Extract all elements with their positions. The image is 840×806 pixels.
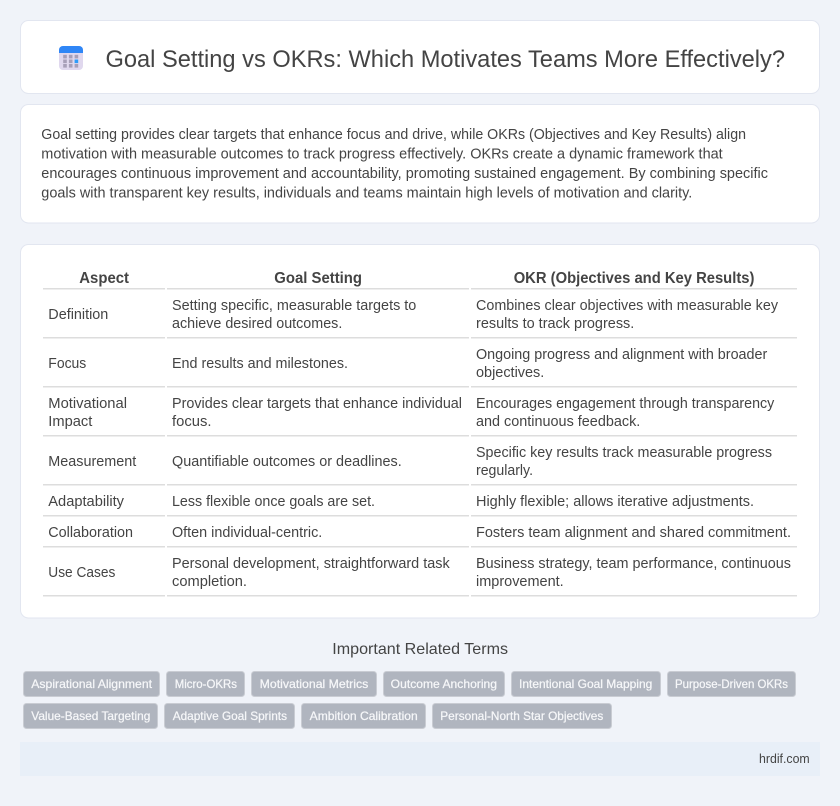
row: use cases: Personal development, straightforward task — [172, 555, 450, 572]
tag: purpose-driven okrs: Purpose-Driven OKRs — [675, 677, 788, 691]
tag: aspirational alignment: Aspirational Alignment — [31, 677, 153, 691]
row: definition: results to track progress. — [476, 315, 634, 332]
tag: personal-north star objectives — [432, 704, 612, 728]
tag: ambition calibration: Ambition Calibration — [310, 709, 418, 723]
row: definition: Definition — [48, 306, 108, 323]
row: measurement: regularly. — [476, 462, 533, 479]
row: focus: objectives. — [476, 364, 544, 381]
row: collaboration — [48, 524, 791, 541]
tag: micro-okrs — [166, 672, 244, 696]
row: definition: achieve desired outcomes. — [172, 315, 342, 332]
row: focus: End results and milestones. — [172, 355, 348, 372]
title: Goal Setting vs OKRs: Which Motivates Teams More Effectively? — [106, 46, 785, 73]
row: motivational impact: Provides clear targets that enhance individual — [172, 395, 462, 412]
footer — [20, 742, 820, 776]
row: definition: Combines clear objectives with measurable key — [476, 297, 778, 314]
panel: comparison table — [20, 244, 820, 618]
tag: motivational metrics — [252, 672, 376, 696]
row: adaptability: Adaptability — [48, 493, 124, 510]
tag: adaptive goal sprints — [164, 704, 294, 728]
table header row: Goal Setting — [274, 270, 362, 287]
related term tags — [24, 672, 796, 728]
tag: value-based targeting — [24, 704, 158, 728]
tag: micro-okrs: Micro-OKRs — [175, 677, 237, 691]
table header row: Aspect — [79, 270, 129, 287]
row: collaboration: Collaboration — [48, 524, 133, 541]
tag: personal-north star objectives: Personal-North Star Objectives — [440, 709, 603, 723]
intro text: goals with transparent key results, individuals and teams maintain high levels of motivation and clarity. — [41, 184, 692, 202]
panel: header — [20, 20, 820, 94]
row: use cases: improvement. — [476, 573, 564, 590]
row: collaboration: Fosters team alignment and shared commitment. — [476, 524, 791, 541]
row: measurement: Measurement — [48, 453, 137, 470]
tag: outcome anchoring: Outcome Anchoring — [391, 677, 497, 691]
row: focus: Focus — [48, 355, 86, 372]
row: motivational impact: Motivational — [48, 395, 127, 412]
row: motivational impact: Encourages engagement through transparency — [476, 395, 775, 412]
tag: ambition calibration — [302, 704, 426, 728]
row: motivational impact: focus. — [172, 413, 212, 430]
row: use cases — [48, 555, 791, 590]
tag: intentional goal mapping — [512, 672, 660, 696]
footer: hrdif.com — [759, 751, 810, 766]
tag: value-based targeting: Value-Based Targeting — [31, 709, 150, 723]
row: measurement: Quantifiable outcomes or deadlines. — [172, 453, 402, 470]
row: motivational impact — [48, 395, 775, 430]
row: motivational impact: Impact — [48, 413, 93, 430]
heading: related terms: Important Related Terms — [332, 641, 508, 658]
row: motivational impact: and continuous feedback. — [476, 413, 640, 430]
tag: aspirational alignment — [24, 672, 160, 696]
icon: calendar — [59, 46, 83, 70]
row: use cases: Business strategy, team performance, continuous — [476, 555, 791, 572]
row: use cases: completion. — [172, 573, 247, 590]
row: definition — [48, 297, 778, 332]
tag: intentional goal mapping: Intentional Goal Mapping — [519, 677, 652, 691]
row: collaboration: Often individual-centric. — [172, 524, 322, 541]
tag: motivational metrics: Motivational Metrics — [260, 677, 368, 691]
intro text: motivation with measurable outcomes to track progress effectively. OKRs create a dynamic framework that — [41, 146, 723, 162]
row: definition: Setting specific, measurable targets to — [172, 297, 416, 314]
intro text — [41, 126, 768, 202]
table header row: OKR (Objectives and Key Results) — [514, 270, 754, 287]
row: adaptability: Less flexible once goals are set. — [172, 493, 375, 510]
row: measurement: Specific key results track measurable progress — [476, 444, 772, 461]
row: use cases: Use Cases — [48, 564, 115, 581]
tag: adaptive goal sprints: Adaptive Goal Sprints — [173, 709, 287, 723]
intro text: encourages continuous improvement and accountability, promoting sustained engagement. By combining specific — [41, 165, 768, 182]
row: adaptability — [48, 493, 754, 510]
row: adaptability: Highly flexible; allows iterative adjustments. — [476, 493, 754, 510]
table header row — [79, 270, 754, 287]
intro text: Goal setting provides clear targets that enhance focus and drive, while OKRs (Objectives and Key Results) align — [41, 126, 746, 143]
row: measurement — [48, 444, 772, 479]
panel: introduction — [20, 104, 820, 223]
table rules — [43, 289, 797, 596]
tag: purpose-driven okrs — [668, 672, 796, 696]
row: focus — [48, 346, 767, 381]
tag: outcome anchoring — [384, 672, 504, 696]
row: focus: Ongoing progress and alignment with broader — [476, 346, 767, 363]
